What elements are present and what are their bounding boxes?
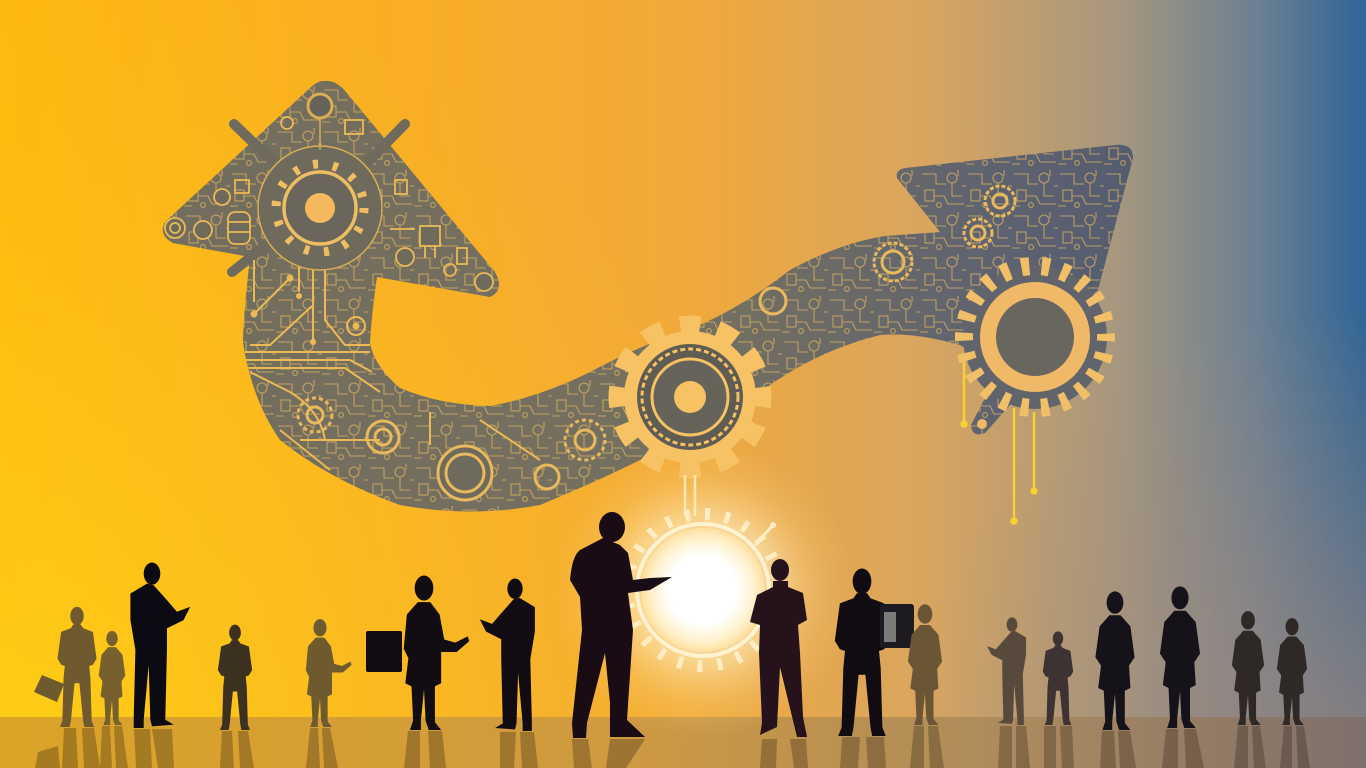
person 14 xyxy=(1095,591,1135,730)
floor reflections xyxy=(35,726,1310,768)
floor band xyxy=(0,717,1366,768)
small gears on shaft xyxy=(298,186,1015,500)
person 10 with case xyxy=(835,569,914,736)
centre gear xyxy=(618,325,762,469)
person 12 xyxy=(987,617,1026,725)
person 9 xyxy=(750,559,807,737)
person 7 xyxy=(480,578,535,731)
diagonal bars on arrow head xyxy=(232,124,405,272)
head icons xyxy=(165,117,493,291)
person 1 with briefcase xyxy=(34,607,97,727)
person 8 central presenter xyxy=(570,512,672,738)
top gear on arrow head xyxy=(258,94,382,270)
person 11 xyxy=(908,604,942,725)
circuit texture xyxy=(163,86,1132,512)
person 16 xyxy=(1232,611,1264,725)
circuit arrow xyxy=(150,70,1150,530)
right gear xyxy=(963,265,1107,429)
light glow behind gear xyxy=(553,440,853,740)
arrow body xyxy=(163,81,1133,512)
person 4 xyxy=(218,625,252,730)
person 3 tall man xyxy=(130,562,190,728)
silhouette crowd xyxy=(34,512,1307,738)
stem dots xyxy=(250,274,365,345)
person 17 xyxy=(1277,618,1307,725)
person 13 xyxy=(1043,631,1073,725)
glowing gear xyxy=(627,475,779,666)
stem traces xyxy=(245,260,540,470)
person 2 xyxy=(99,631,125,725)
yellow drip lines xyxy=(962,362,1036,524)
person 6 with briefcase xyxy=(366,576,469,730)
person 5 xyxy=(306,619,352,727)
person 15 xyxy=(1160,586,1200,728)
